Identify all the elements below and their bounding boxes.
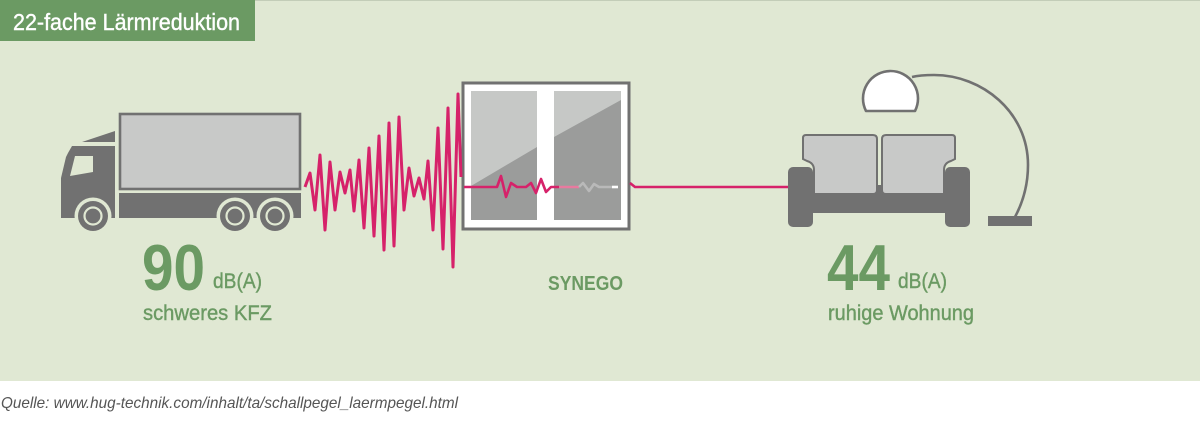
chart: sound wave loud [305, 94, 461, 267]
text: apartment noise level: 44 [827, 231, 890, 304]
text: apartment noise level: ruhige Wohnung [828, 302, 974, 325]
text: window label: SYNEGO [548, 273, 623, 295]
text: source: Quelle: www.hug-technik.com/inhalt/ta/schallpegel_laermpegel.html [1, 395, 458, 412]
icon: truck [61, 114, 301, 234]
title [0, 0, 255, 41]
title: 22-fache Lärmreduktion [13, 9, 240, 35]
chart: sound wave quiet [630, 183, 788, 187]
icon: arc lamp [863, 71, 1032, 226]
text: truck noise level: 90 [142, 231, 205, 304]
icon: window [463, 83, 629, 229]
chart: sound wave dampened in window [464, 176, 618, 197]
text: apartment noise level: dB(A) [898, 270, 947, 293]
text: truck noise level: schweres KFZ [143, 302, 272, 325]
text: apartment noise level [827, 231, 974, 325]
icon: sofa [788, 135, 970, 227]
text: truck noise level: dB(A) [213, 270, 262, 293]
text: truck noise level [142, 231, 272, 325]
